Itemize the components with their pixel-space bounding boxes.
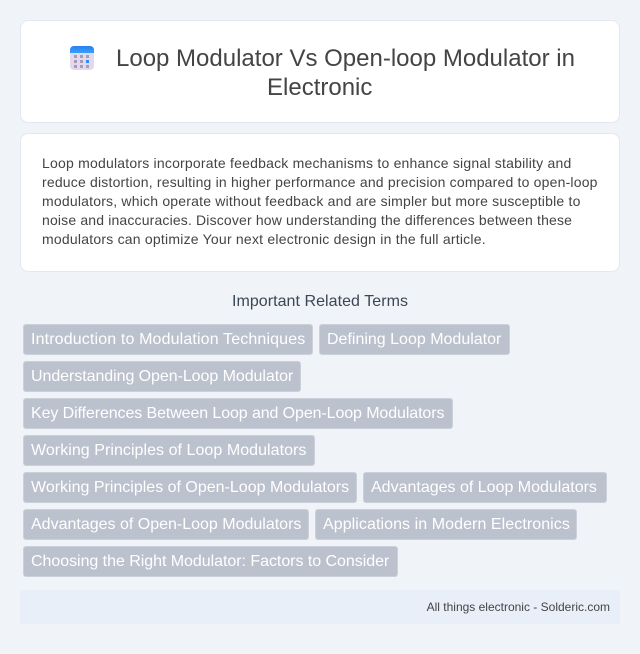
tag: Choosing the Right Modulator: Factors to Consider — [31, 553, 389, 570]
header card — [20, 20, 620, 123]
tag — [315, 509, 577, 540]
tag: Working Principles of Loop Modulators — [31, 442, 306, 459]
footer text: All things electronic - Solderic.com — [427, 600, 610, 614]
icon: calendar — [70, 46, 94, 70]
title: Loop Modulator Vs Open-loop Modulator in — [116, 45, 575, 72]
title: Electronic — [267, 74, 372, 101]
tag: Introduction to Modulation Techniques — [31, 331, 305, 348]
description card — [20, 133, 620, 272]
description text: noise and inaccuracies. Discover how understanding the differences between these — [42, 212, 572, 228]
tag — [23, 361, 301, 392]
related terms heading: Important Related Terms — [232, 293, 408, 310]
footer bar — [20, 590, 620, 624]
description text — [42, 155, 598, 247]
description text: Loop modulators incorporate feedback mechanisms to enhance signal stability and — [42, 155, 571, 171]
tag — [23, 398, 453, 429]
tag: Understanding Open-Loop Modulator — [31, 368, 293, 385]
tag: Applications in Modern Electronics — [323, 516, 570, 533]
tag — [23, 546, 398, 577]
tag: Advantages of Loop Modulators — [371, 479, 597, 496]
description text: modulators, which operate without feedback and are simpler but more susceptible to — [42, 193, 581, 209]
tag: Working Principles of Open-Loop Modulators — [31, 479, 349, 496]
tag — [23, 472, 357, 503]
description text: reduce distortion, resulting in higher performance and precision compared to open-loop — [42, 174, 598, 190]
tag — [23, 509, 309, 540]
tag — [363, 472, 607, 503]
related terms tags — [23, 324, 607, 577]
tag: Advantages of Open-Loop Modulators — [31, 516, 301, 533]
title — [116, 45, 575, 101]
tag: Key Differences Between Loop and Open-Loop Modulators — [31, 405, 444, 422]
tag — [23, 324, 313, 355]
tag: Defining Loop Modulator — [327, 331, 501, 348]
tag — [23, 435, 315, 466]
description text: modulators can optimize Your next electronic design in the full article. — [42, 231, 486, 247]
tag — [319, 324, 510, 355]
